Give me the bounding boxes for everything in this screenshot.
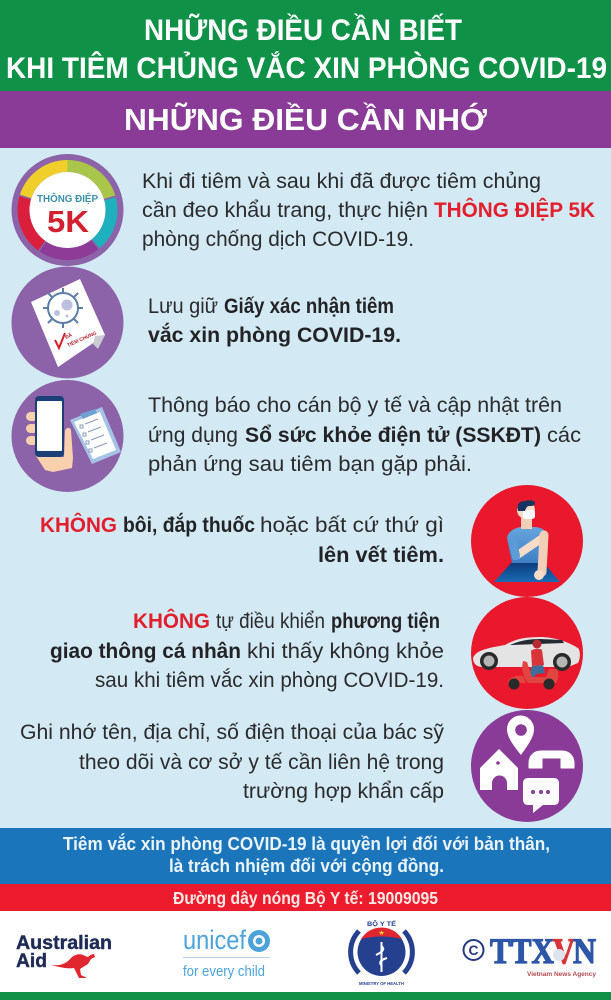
text block: do not apply medicine: hoặc bất cứ thứ gì [260, 513, 444, 537]
logo: unicef: unicef [183, 925, 246, 955]
logo strip [0, 911, 611, 992]
text block: 5K reminder [142, 169, 595, 251]
text block: do not apply medicine: bôi, đắp thuốc [123, 512, 255, 537]
text block: keep certificate: Giấy xác nhận tiêm [224, 294, 394, 318]
text block: notify health workers [148, 393, 581, 476]
text block: notify health workers: Thông báo cho cán bộ y tế và cập nhật trên [148, 393, 562, 417]
logo: unicef [183, 925, 270, 980]
icon: man touching injection site [471, 485, 583, 597]
header: main title [0, 0, 611, 91]
text block: notify health workers: Sổ sức khỏe điện tử (SSKĐT) [245, 423, 541, 447]
logo: unicef: for every child [183, 963, 265, 980]
text block: 5K reminder: phòng chống dịch COVID-19. [142, 227, 414, 251]
text block: remember doctor contact [20, 720, 444, 803]
icon: 5K message badge: THÔNG ĐIỆP [37, 192, 98, 205]
icon: vaccination certificate [12, 266, 124, 378]
banner: rights and responsibility: Tiêm vắc xin phòng COVID-19 là quyền lợi đối với bản thân, [63, 833, 550, 854]
subheader: things to remember [0, 91, 611, 148]
subheader: things to remember: NHỮNG ĐIỀU CẦN NHỚ [124, 101, 488, 137]
icon: car and scooter [471, 597, 583, 709]
text block: keep certificate [148, 294, 401, 347]
text block: notify health workers: ứng dụng [148, 423, 238, 447]
icon: phone and clipboard [12, 380, 124, 492]
text block: do not apply medicine [40, 512, 444, 567]
text block: remember doctor contact: Ghi nhớ tên, địa chỉ, số điện thoại của bác sỹ [20, 720, 444, 744]
text block: do not apply medicine: KHÔNG [40, 512, 117, 537]
text block: do not drive: KHÔNG [133, 608, 210, 633]
logo: TTXVN: C [468, 942, 478, 958]
banner: hotline: Đường dây nóng Bộ Y tế: 19009095 [173, 888, 438, 908]
logo: Ministry of Health: MINISTRY OF HEALTH [359, 981, 404, 986]
icon: vaccination certificate: TIÊM CHỦNG [66, 329, 98, 349]
text block: keep certificate: vắc xin phòng COVID-19. [148, 322, 401, 347]
text block: do not drive [50, 608, 444, 692]
text block: 5K reminder: cần đeo khẩu trang, thực hiện [142, 198, 428, 222]
logo: Ministry of Health: BỘ Y TẾ [367, 918, 397, 928]
text block: notify health workers: các [547, 423, 581, 447]
logo: TTXVN: V [553, 931, 575, 971]
footer bar [0, 992, 611, 1000]
logo: Ministry of Health [351, 918, 412, 986]
text block: do not drive: tự điều khiển [216, 609, 325, 633]
icon: location, house, phone, chat [471, 710, 583, 822]
logo: Australian Aid: Australian [16, 933, 112, 954]
logo: TTXVN: TTX [490, 931, 554, 971]
text block: do not drive: khi thấy không khỏe [247, 639, 444, 663]
text block: do not apply medicine: lên vết tiêm. [318, 543, 444, 567]
text block: do not drive: sau khi tiêm vắc xin phòng COVID-19. [95, 667, 444, 692]
banner: rights and responsibility [0, 828, 611, 884]
text block: 5K reminder: THÔNG ĐIỆP 5K [434, 197, 595, 222]
icon: 5K message badge [12, 154, 124, 266]
text block: keep certificate: Lưu giữ [148, 294, 218, 318]
text block: do not drive: giao thông cá nhân [50, 639, 241, 663]
banner: hotline [0, 884, 611, 911]
logo: Australian Aid [16, 933, 112, 978]
text block: notify health workers: phản ứng sau tiêm bạn gặp phải. [148, 452, 472, 476]
text block: do not drive: phương tiện [331, 609, 440, 633]
logo: TTXVN [464, 931, 596, 978]
header: main title: NHỮNG ĐIỀU CẦN BIẾT [144, 13, 462, 47]
icon: vaccination certificate: ĐÃ [64, 331, 74, 341]
logo: TTXVN: N [573, 931, 596, 971]
text block: 5K reminder: Khi đi tiêm và sau khi đã được tiêm chủng [142, 169, 541, 193]
text block: remember doctor contact: trường hợp khẩn cấp [243, 779, 444, 803]
logo: Australian Aid: Aid [16, 951, 47, 972]
banner: rights and responsibility: là trách nhiệm đối với cộng đồng. [169, 855, 444, 876]
text block: remember doctor contact: theo dõi và cơ sở y tế cần liên hệ trong [79, 750, 444, 774]
icon: 5K message badge: 5K [47, 204, 90, 239]
logo: TTXVN: Vietnam News Agency [527, 971, 596, 978]
